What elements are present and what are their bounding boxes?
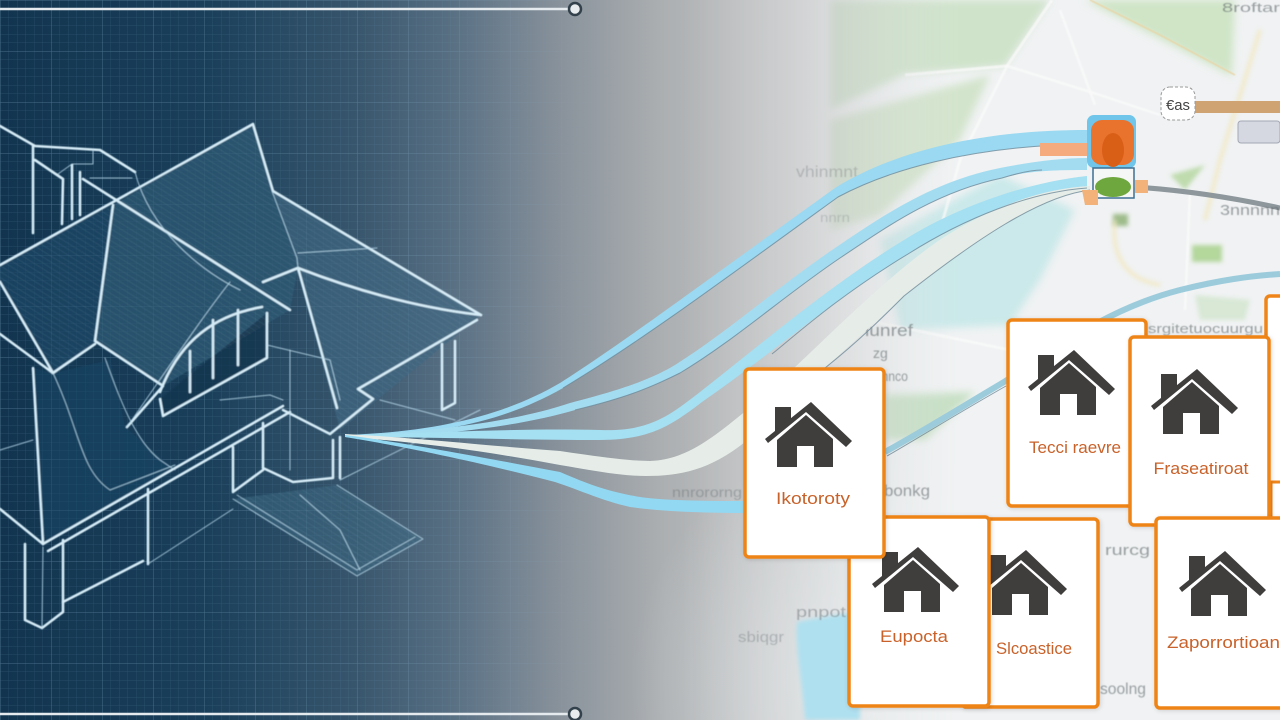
pin inner core [1102, 133, 1124, 167]
card: Slcoastice [962, 519, 1098, 707]
map road: tan highway [1195, 101, 1280, 113]
roof facets [0, 124, 481, 576]
icon: house [765, 402, 852, 467]
card: Fraseatiroat [1130, 337, 1269, 525]
faint map labels: vhinmnt [796, 164, 859, 181]
icon: house [1151, 369, 1238, 434]
card: Tecci raevre [1008, 320, 1146, 506]
card label: Eupocta [880, 627, 949, 646]
faint map labels: zg [873, 345, 888, 361]
lower lightening overlay [620, 430, 1120, 720]
faint map labels: sbiqgr [738, 629, 784, 646]
card frame [849, 517, 989, 706]
orange bar [1040, 143, 1087, 156]
map pin connector [1040, 115, 1148, 205]
map sign [1238, 121, 1280, 143]
map water: lower left [797, 612, 860, 720]
right edge cards [1266, 296, 1280, 522]
pin blue surround [1087, 115, 1136, 168]
card frame [745, 369, 884, 557]
icon: house [980, 550, 1067, 615]
faint map labels: nnrororng [672, 484, 742, 500]
map badge [1161, 87, 1195, 120]
faint map labels [672, 0, 1280, 698]
stream: third blue [345, 176, 1087, 440]
faint map labels: mnco [878, 368, 908, 384]
card: Eupocta [849, 517, 989, 706]
card: Ikotoroty [745, 369, 884, 557]
faint map labels: rurcg [1105, 542, 1150, 559]
card frame [1130, 337, 1269, 525]
pin green ellipse [1095, 177, 1131, 197]
stream: large arc [885, 274, 1280, 452]
card frame [962, 519, 1098, 707]
card label: Tecci raevre [1029, 438, 1121, 457]
faint map labels: 3nnnnn [1220, 202, 1280, 219]
stream: pale band [345, 186, 1090, 476]
top rule with node [0, 3, 581, 15]
icon: house [1179, 551, 1266, 616]
heavy outline [0, 124, 481, 628]
stream: lower blue [345, 435, 745, 513]
stream: upper blue [345, 130, 1087, 436]
stream: second blue [345, 158, 1087, 437]
card frame [1008, 320, 1146, 506]
card label: Fraseatiroat [1154, 459, 1249, 478]
pin orange body [1091, 120, 1134, 165]
faint map labels: pnpot [796, 604, 847, 621]
stream edge lines [563, 144, 1090, 456]
map background [734, 0, 1262, 720]
map badge: €as [1166, 97, 1190, 114]
card: Zaporrortioan [1156, 518, 1280, 708]
icon: house [872, 547, 959, 612]
card label: Zaporrortioan [1167, 633, 1280, 652]
blueprint grid [0, 0, 536, 720]
card label: Ikotoroty [776, 489, 851, 508]
pin orange marks [1082, 180, 1148, 205]
blueprint house [0, 124, 481, 628]
icon: house [1028, 350, 1115, 415]
map road: grey highway [1135, 187, 1280, 208]
data streams [345, 130, 1280, 513]
faint map labels: srgitetuocuurgu [1148, 321, 1263, 336]
faint map labels: 8roftar [1222, 0, 1280, 15]
pin base [1093, 168, 1134, 198]
bottom rule with node [0, 708, 581, 720]
card label: Slcoastice [996, 639, 1072, 658]
faint map labels: soolng [1100, 681, 1146, 698]
card frame [1156, 518, 1280, 708]
fine linework [0, 150, 480, 628]
faint map labels: nnrn [820, 210, 850, 225]
faint map labels: bonkg [884, 483, 930, 500]
faint map labels: iunref [865, 321, 913, 340]
